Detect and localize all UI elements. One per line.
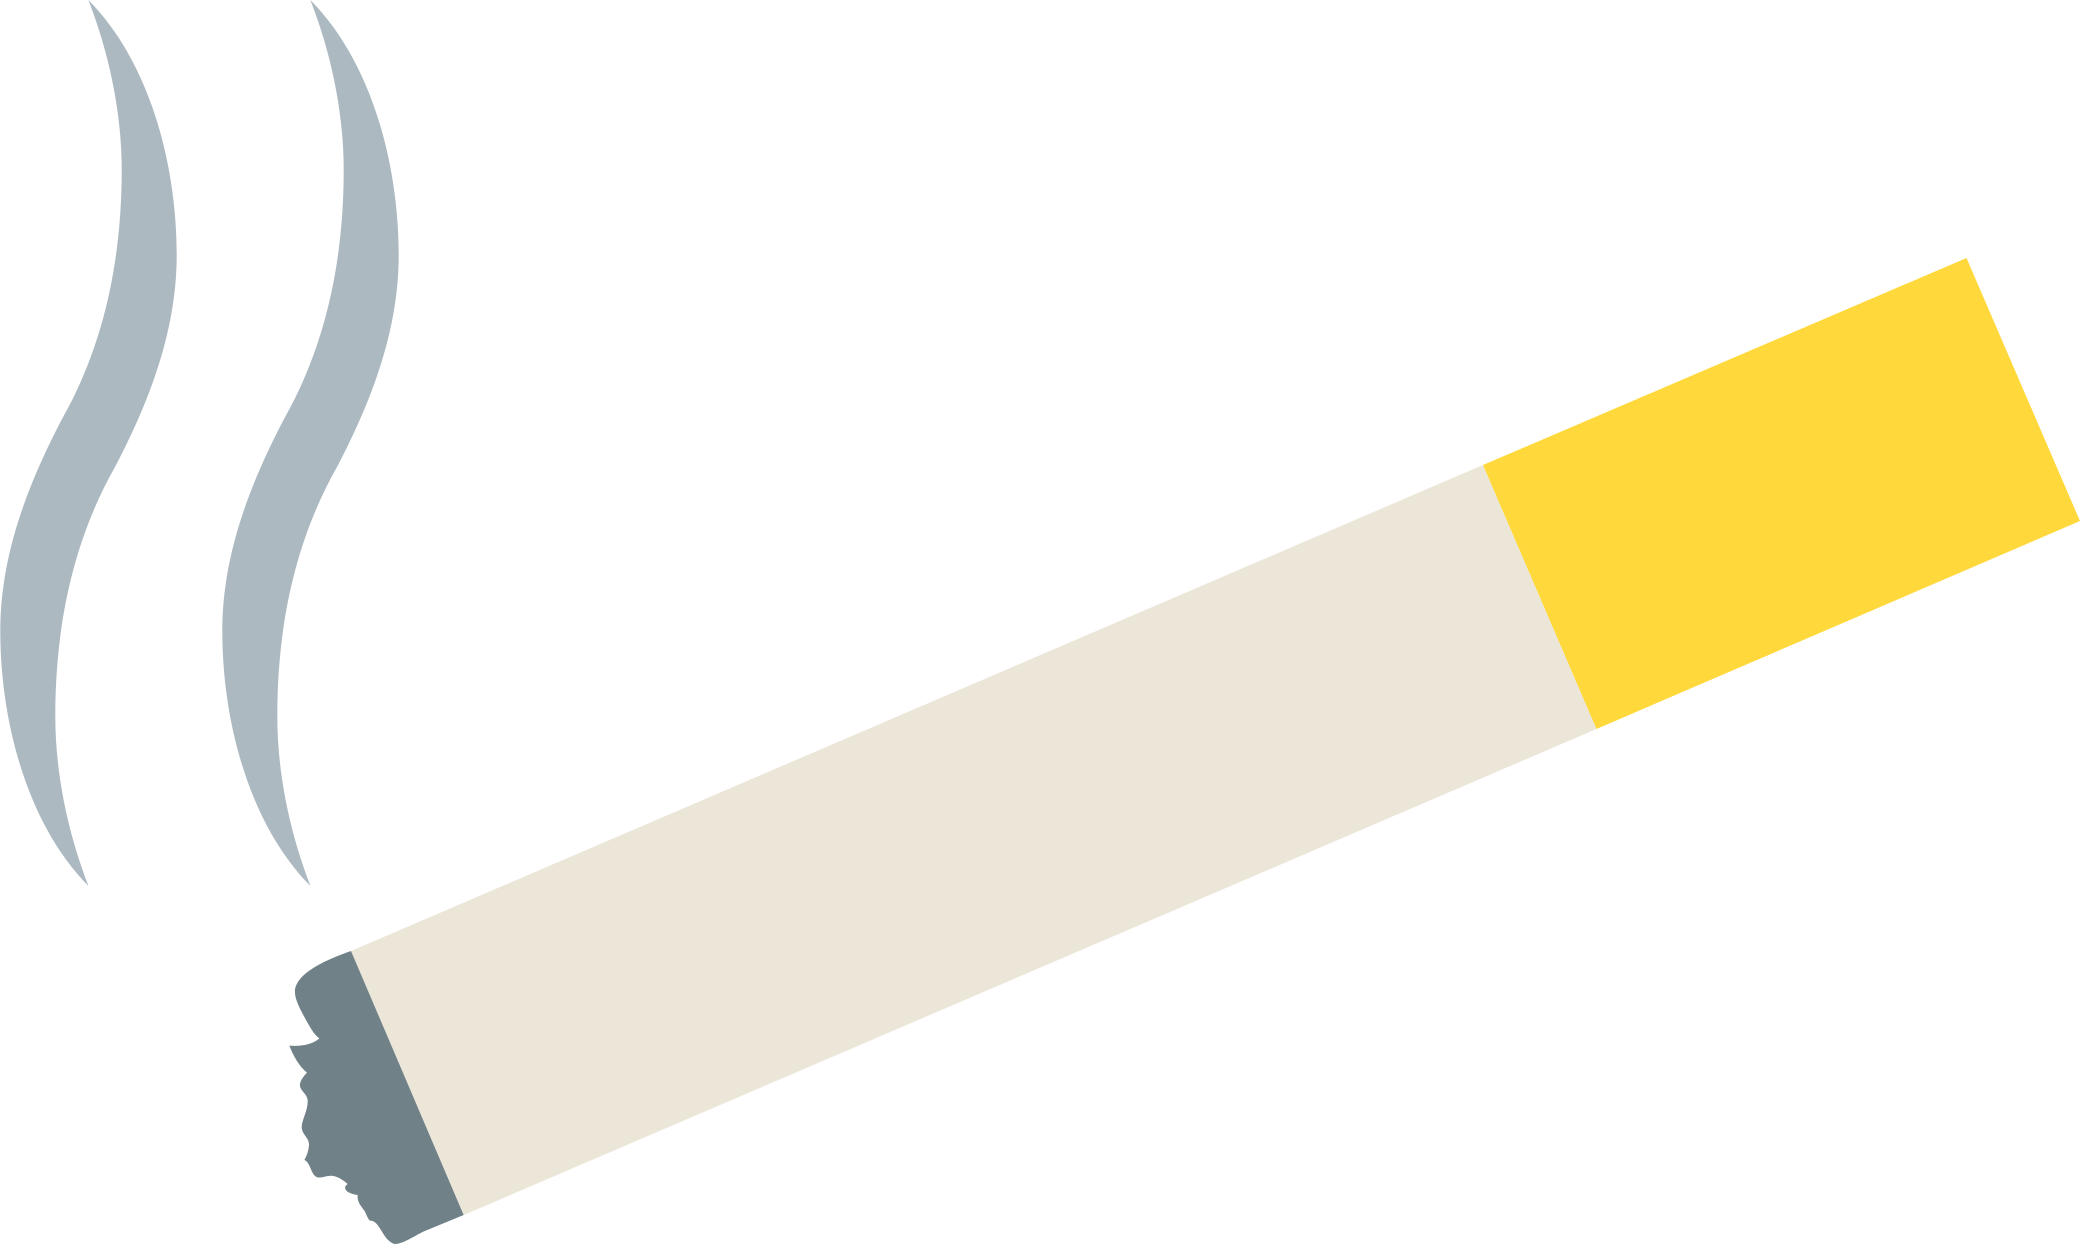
burnt ash tip [289, 951, 464, 1244]
cigarette paper body [351, 465, 1596, 1215]
cigarette filter [1483, 258, 2080, 729]
icon: smoke wisp right [222, 0, 399, 886]
icon: smoke wisp left [0, 0, 177, 886]
